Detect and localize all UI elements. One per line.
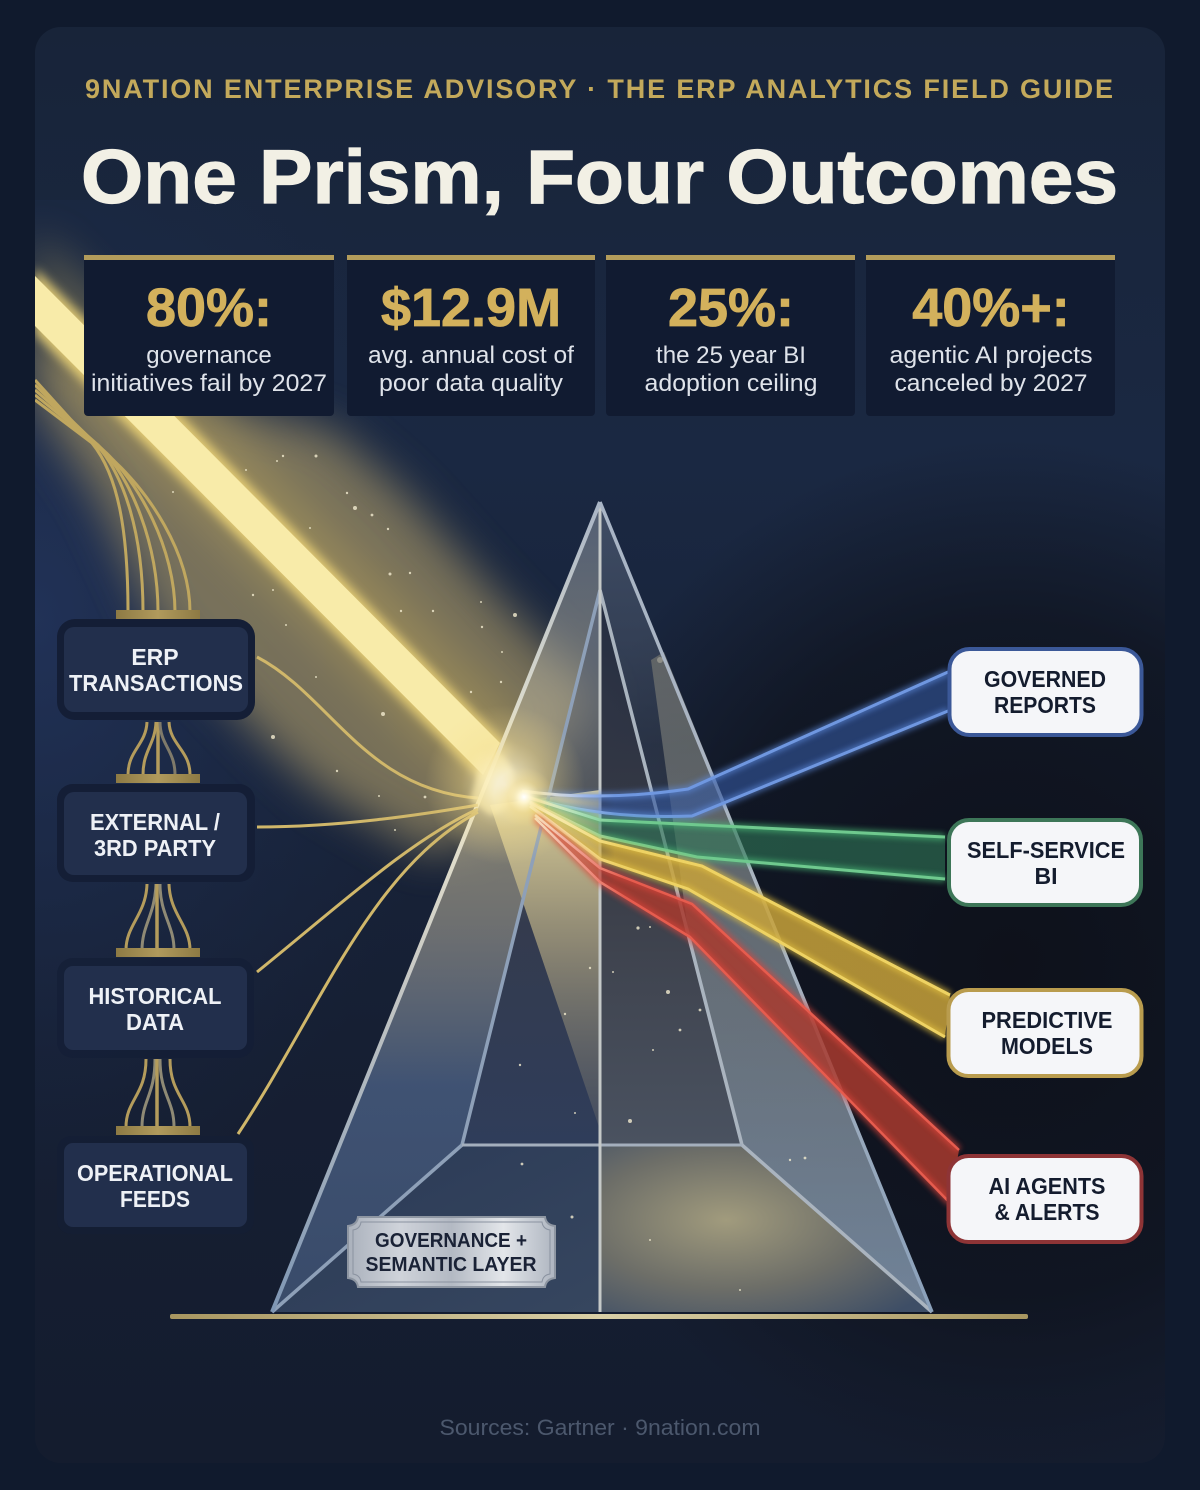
stat card: 40%+: agentic AI projects [890,342,1092,369]
output card: AI agents and alerts: AI AGENTS [988,1173,1106,1199]
stat card: 40%+ [866,255,1115,416]
prism refracted light wedge [490,790,600,1130]
input node: ERP transactions [57,619,255,720]
output card: governed reports [950,649,1142,735]
prism light strip on right face [651,652,932,1312]
prism base right [600,1145,932,1312]
output beam: AI agents and alerts [535,815,959,1203]
output card: governed reports: REPORTS [994,692,1096,718]
stat card: 80%: initiatives fail by 2027 [91,370,327,397]
prism base left [272,1145,600,1312]
stat card: $12.9M [347,255,595,416]
connector: external to historical [116,884,200,957]
output card: predictive models: MODELS [1001,1033,1093,1059]
input node: ERP transactions: TRANSACTIONS [69,670,243,696]
star dust [172,454,806,1291]
stat card: $12.9M: poor data quality [379,370,563,397]
output card: self-service BI [949,820,1141,905]
sources footer: Sources: Gartner · 9nation.com [440,1415,760,1440]
input node: external / 3rd party: EXTERNAL / [90,809,221,835]
connector: ERP to external [116,722,200,783]
prism right outer face [600,502,932,1312]
output card: predictive models [948,990,1142,1076]
output card: AI agents and alerts: & ALERTS [994,1199,1100,1225]
connector bar: above ERP [116,610,200,619]
gold light haze [35,340,600,855]
stat card: 25%: 25%: [668,278,794,338]
output card: AI agents and alerts [948,1156,1142,1242]
prism left outer face [272,502,600,1312]
input node: historical data: HISTORICAL [88,983,222,1009]
output card: self-service BI: BI [1034,863,1058,889]
stat card: $12.9M: $12.9M [381,278,561,338]
stat card: 25%: adoption ceiling [644,370,818,397]
output beam: self-service BI [530,798,945,879]
input node: ERP transactions: ERP [131,644,179,670]
stat card: 25%: the 25 year BI [656,342,806,369]
input node: operational feeds [57,1136,254,1234]
prism inner left face [462,590,600,1145]
base line [170,1314,1028,1319]
governance plaque: GOVERNANCE + [375,1230,527,1252]
connector: historical to operational [116,1059,200,1135]
output card: self-service BI: SELF-SERVICE [967,837,1125,863]
title: One Prism, Four Outcomes [81,135,1118,220]
stat card: 80%: 80%: [146,278,272,338]
stat card: $12.9M: avg. annual cost of [368,342,574,369]
stat card: 25% [606,255,855,416]
prism [272,502,932,1312]
input cables into first node [35,380,190,612]
input node: historical data: DATA [126,1009,184,1035]
governance plaque: SEMANTIC LAYER [366,1254,537,1276]
input node: historical data [57,958,254,1058]
input node: external / 3rd party [57,784,255,882]
stat card: 40%+: 40%+: [912,278,1070,338]
output card: governed reports: GOVERNED [984,666,1106,692]
stat card: 80%: governance [146,342,272,369]
prism inner right face [600,590,742,1145]
stat card: 80% [84,255,334,416]
prism lines [272,502,932,1312]
governance plaque [348,1217,555,1287]
incoming light beam [35,232,530,800]
input node: external / 3rd party: 3RD PARTY [94,835,216,861]
output beam: governed reports [522,672,948,817]
input node: operational feeds: OPERATIONAL [77,1160,233,1186]
eyebrow heading: 9NATION ENTERPRISE ADVISORY · THE ERP ANALYTICS FIELD GUIDE [85,74,1113,104]
stat card: 40%+: canceled by 2027 [894,370,1088,397]
output beam: predictive models [530,803,950,1037]
refraction flare [432,714,579,858]
input node: operational feeds: FEEDS [120,1186,190,1212]
input rays into prism [238,657,478,1134]
output card: predictive models: PREDICTIVE [982,1007,1112,1033]
